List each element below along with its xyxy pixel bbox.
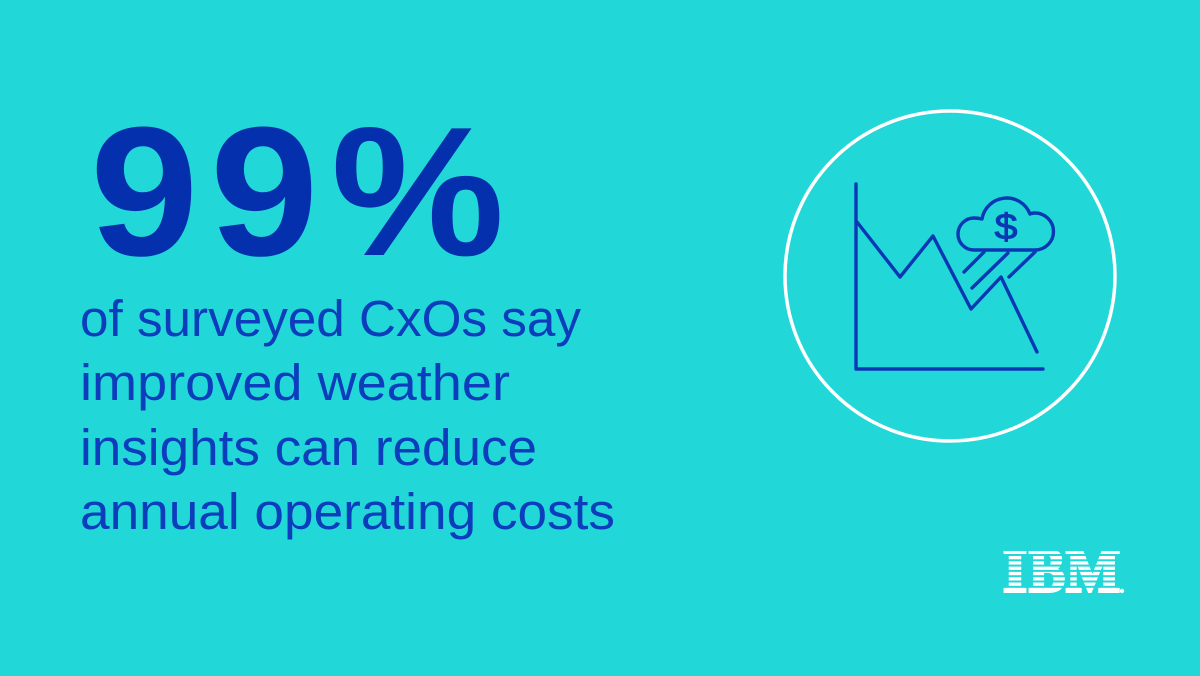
icon: falling chart with storm cloud and dollar sign: [856, 184, 1054, 369]
rain streaks: [964, 252, 1035, 288]
logo wordmark: B: [1029, 538, 1065, 606]
logo wordmark: [1003, 538, 1120, 606]
body text: survey finding: of surveyed CxOs say: [80, 290, 582, 347]
chart declining line: [857, 222, 1037, 352]
logo registered dot: [1120, 589, 1124, 593]
body text: survey finding: improved weather: [80, 354, 510, 411]
headline statistic: 99%: 99%: [90, 89, 504, 295]
icon circle outline: [785, 111, 1115, 441]
logo wordmark: I: [1003, 538, 1027, 606]
logo wordmark: M: [1066, 538, 1120, 606]
body text: survey finding: insights can reduce: [80, 419, 537, 476]
logo stripes: [996, 546, 1126, 597]
chart axes: [856, 184, 1043, 369]
dollar sign: $: [994, 207, 1018, 247]
IBM logo: [996, 538, 1126, 606]
cloud: [958, 198, 1054, 250]
body text: survey finding: [80, 290, 615, 540]
body text: survey finding: annual operating costs: [80, 483, 615, 540]
